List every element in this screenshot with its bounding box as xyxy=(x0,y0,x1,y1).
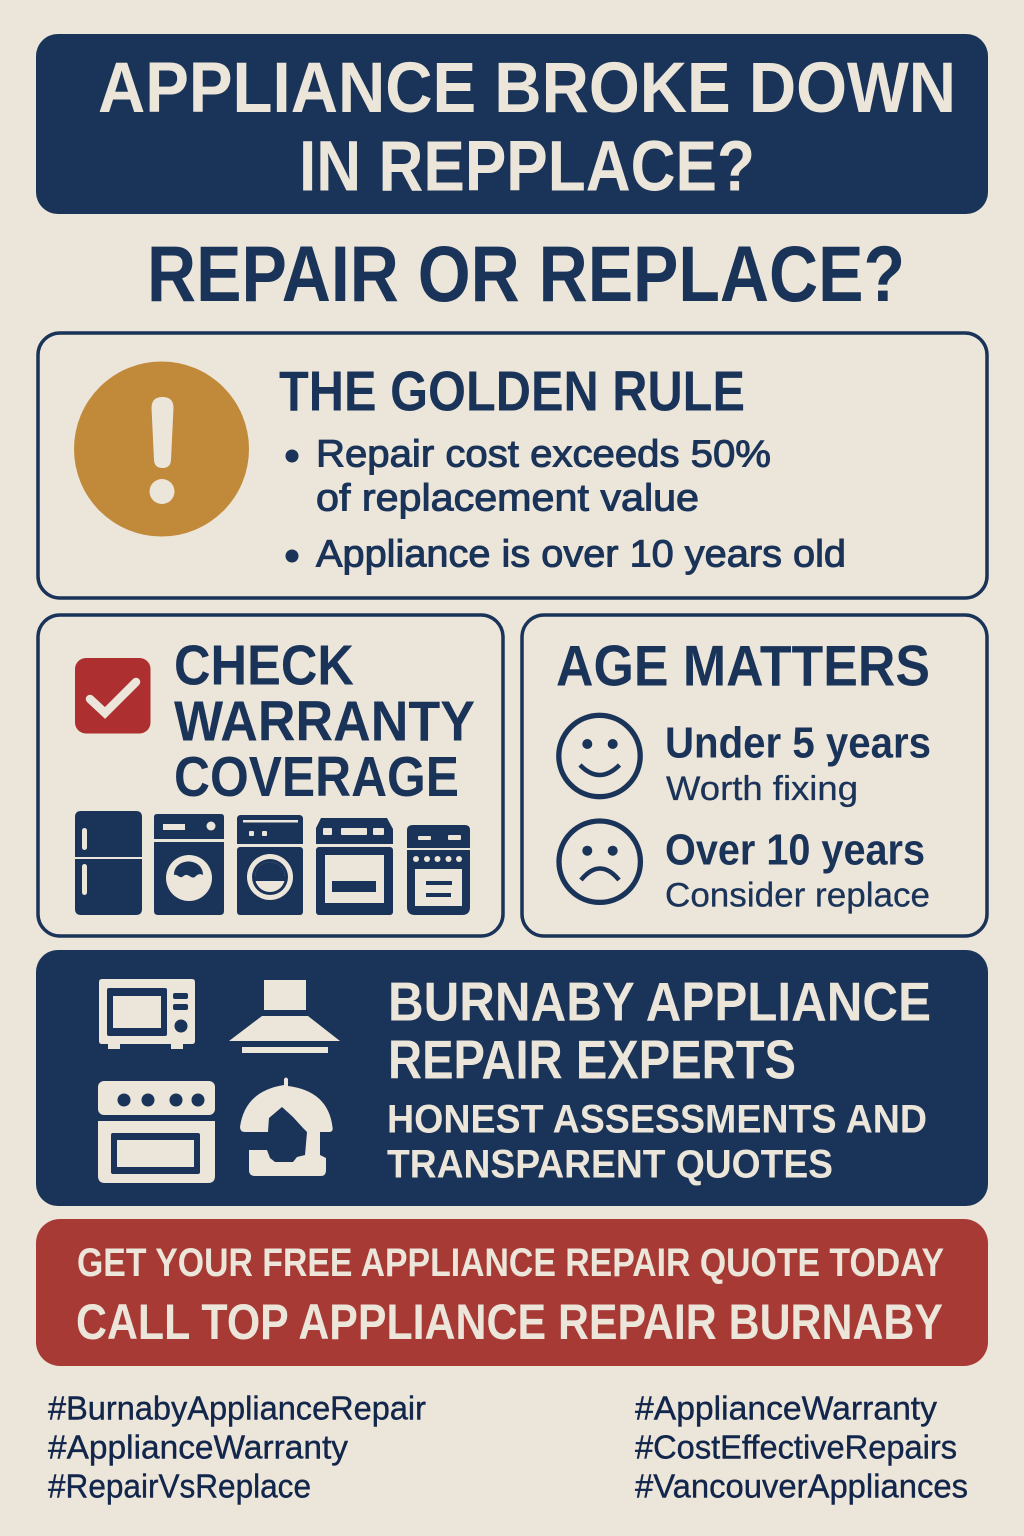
warranty heading xyxy=(174,634,475,809)
icon: stove xyxy=(407,825,470,915)
warranty heading: CHECK xyxy=(174,634,354,698)
golden rule bullets: Appliance is over 10 years old xyxy=(316,534,846,576)
hashtags left: #ApplianceWarranty xyxy=(48,1428,349,1466)
hashtags left: #BurnabyApplianceRepair xyxy=(48,1390,426,1426)
over 10 years text: Consider replace xyxy=(665,876,930,914)
experts text: TRANSPARENT QUOTES xyxy=(387,1142,833,1186)
hashtags right xyxy=(635,1390,968,1504)
experts text: REPAIR EXPERTS xyxy=(388,1028,796,1090)
icon: sad face xyxy=(559,821,640,902)
title banner: IN REPPLACE? xyxy=(299,128,755,206)
hashtags left xyxy=(48,1390,426,1504)
over 10 years text xyxy=(665,826,930,914)
icon: microwave xyxy=(99,979,195,1049)
age matters heading: AGE MATTERS xyxy=(556,634,930,698)
icon: red checkbox xyxy=(75,658,150,734)
heading: repair or replace: REPAIR OR REPLACE? xyxy=(147,229,905,318)
experts text: HONEST ASSESSMENTS AND xyxy=(387,1098,927,1142)
golden rule heading: THE GOLDEN RULE xyxy=(279,360,745,422)
panel: burnaby appliance repair experts xyxy=(36,950,988,1206)
warranty heading: WARRANTY xyxy=(174,690,475,754)
under 5 years text: Worth fixing xyxy=(666,770,858,808)
title banner xyxy=(36,34,988,214)
over 10 years text: Over 10 years xyxy=(665,826,925,874)
icon: dryer xyxy=(237,815,303,915)
panel: the golden rule xyxy=(38,333,987,598)
title banner: APPLIANCE BROKE DOWN xyxy=(98,49,956,128)
panel: call to action xyxy=(36,1219,988,1366)
hashtags right: #ApplianceWarranty xyxy=(635,1390,938,1426)
hashtags right: #CostEffectiveRepairs xyxy=(635,1428,957,1466)
under 5 years text: Under 5 years xyxy=(665,720,931,768)
golden rule bullets: of replacement value xyxy=(316,478,699,520)
icon: exclamation warning xyxy=(74,362,249,536)
golden rule bullets: Repair cost exceeds 50% xyxy=(316,434,771,476)
hashtags right: #VancouverAppliances xyxy=(635,1468,968,1504)
golden rule bullets xyxy=(286,434,846,576)
under 5 years text xyxy=(665,720,931,808)
icon: stove range xyxy=(98,1081,215,1183)
panel: age matters xyxy=(522,615,987,936)
icon: oven xyxy=(316,818,393,915)
experts text xyxy=(387,970,931,1186)
panel: check warranty coverage xyxy=(38,615,503,936)
warranty heading: COVERAGE xyxy=(174,745,459,809)
hashtags left: #RepairVsReplace xyxy=(48,1468,311,1504)
icon: smiley face xyxy=(559,715,640,797)
icon: refrigerator xyxy=(75,811,142,915)
icon: front-load washer xyxy=(154,814,224,915)
icon: range hood xyxy=(229,980,340,1053)
experts text: BURNABY APPLIANCE xyxy=(388,970,931,1032)
icon: dome appliance xyxy=(240,1078,333,1176)
